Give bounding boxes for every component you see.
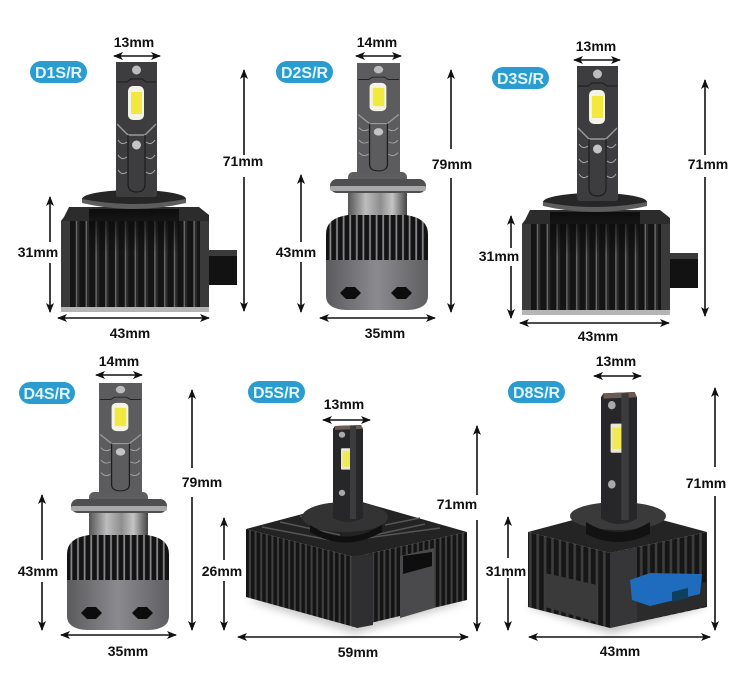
badge: D4S/R: D4S/R [23,386,71,403]
dimension: 13mm width [323,396,370,420]
dimension: 14mm width [356,34,401,56]
dimension: 79mm height: 79mm [432,156,472,172]
dimension: 35mm width: 35mm [365,325,405,341]
badge: D2S/R [276,61,333,83]
badge: D3S/R: D3S/R [497,71,545,88]
bulb: D2S/R [326,63,428,310]
dimension: 26mm height: 26mm [202,563,242,579]
dimension: 13mm width [594,353,641,376]
dimension: 13mm width: 13mm [114,34,154,50]
dimension: 13mm width: 13mm [576,38,616,54]
panel: D4S/R [18,353,222,659]
badge: D5S/R: D5S/R [253,385,301,402]
dimension: 31mm height [479,216,519,318]
badge: D8S/R: D8S/R [513,385,561,402]
panel: D5S/R [202,381,477,660]
dimension: 13mm width: 13mm [596,353,636,369]
dimension: 35mm width: 35mm [108,643,148,659]
dimension: 79mm height: 79mm [182,474,222,490]
dimension: 43mm height: 43mm [276,244,316,260]
dimension: 59mm width: 59mm [338,644,378,660]
bulb: D4S/R [67,383,169,630]
dimension: 35mm width [61,635,176,659]
badge: D5S/R [248,381,305,403]
dimension: 14mm width: 14mm [99,353,139,369]
dimension: 71mm height: 71mm [223,153,263,169]
panel: D1S/R [18,34,263,341]
panel: D2S/R [276,34,472,341]
dimension: 35mm width [320,318,435,341]
dimension: 43mm height: 43mm [18,563,58,579]
dimension: 31mm height: 31mm [486,563,526,579]
dimension: 71mm height: 71mm [686,475,726,491]
badge: D4S/R [19,382,75,404]
dimension: 43mm width: 43mm [600,643,640,659]
dimension: 31mm height [18,197,58,312]
dimension: 14mm width: 14mm [357,34,397,50]
dimension: 31mm height: 31mm [18,244,58,260]
dimension: 43mm width: 43mm [578,328,618,344]
bulb: D1S/R [61,62,237,312]
bulb: D8S/R [526,392,708,634]
badge: D2S/R: D2S/R [281,65,329,82]
badge: D8S/R [508,381,565,403]
dimension: 43mm height [276,175,316,312]
badge: D1S/R: D1S/R [35,65,83,82]
bulb: D5S/R [246,425,467,634]
dimension: 43mm width: 43mm [110,325,150,341]
panel: D8S/R [486,353,726,659]
dimension: 43mm height [18,495,58,630]
dimension: 71mm height: 71mm [688,156,728,172]
dimension: 13mm width [114,34,160,56]
panel: D3S/R [479,38,728,344]
dimension: 13mm width: 13mm [324,396,364,412]
dimension: 26mm height [202,518,242,630]
dimension: 13mm width [574,38,620,60]
badge: D3S/R [492,67,549,89]
bulb: D3S/R [522,66,698,315]
dimension: 71mm height: 71mm [437,496,477,512]
dimension: 31mm height: 31mm [479,248,519,264]
dimension: 14mm width [96,353,142,375]
badge: D1S/R [30,61,87,83]
dimension: 31mm height [486,517,526,630]
